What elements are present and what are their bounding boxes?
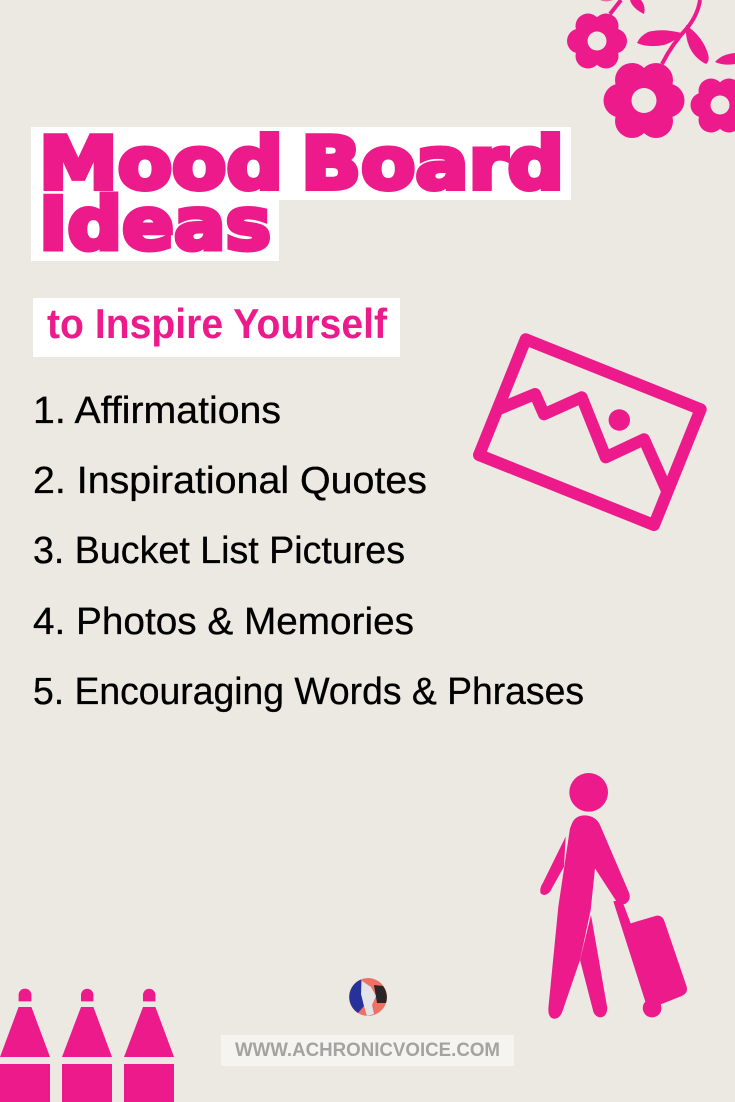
title bbox=[31, 122, 571, 266]
icon: traveller with suitcase bbox=[540, 773, 687, 1019]
title: Mood bbox=[39, 122, 283, 206]
title: Ideas bbox=[39, 182, 271, 266]
list of mood board ideas: 3. Bucket List Pictures bbox=[33, 530, 405, 572]
icon: pencils bbox=[0, 989, 174, 1102]
icon: tilted picture frame bbox=[479, 339, 701, 525]
list of mood board ideas: 2. Inspirational Quotes bbox=[33, 460, 427, 502]
list of mood board ideas bbox=[33, 390, 584, 713]
list of mood board ideas: 4. Photos & Memories bbox=[33, 601, 414, 643]
website footer: WWW.ACHRONICVOICE.COM bbox=[235, 1040, 500, 1061]
list of mood board ideas: 1. Affirmations bbox=[33, 390, 281, 432]
website footer bbox=[221, 1035, 514, 1066]
title: Board bbox=[301, 122, 564, 206]
icon: logo avatar bbox=[349, 978, 387, 1016]
icon: flowers bbox=[567, 0, 735, 138]
subtitle: to Inspire Yourself bbox=[47, 300, 388, 347]
list of mood board ideas: 5. Encouraging Words & Phrases bbox=[33, 671, 584, 713]
